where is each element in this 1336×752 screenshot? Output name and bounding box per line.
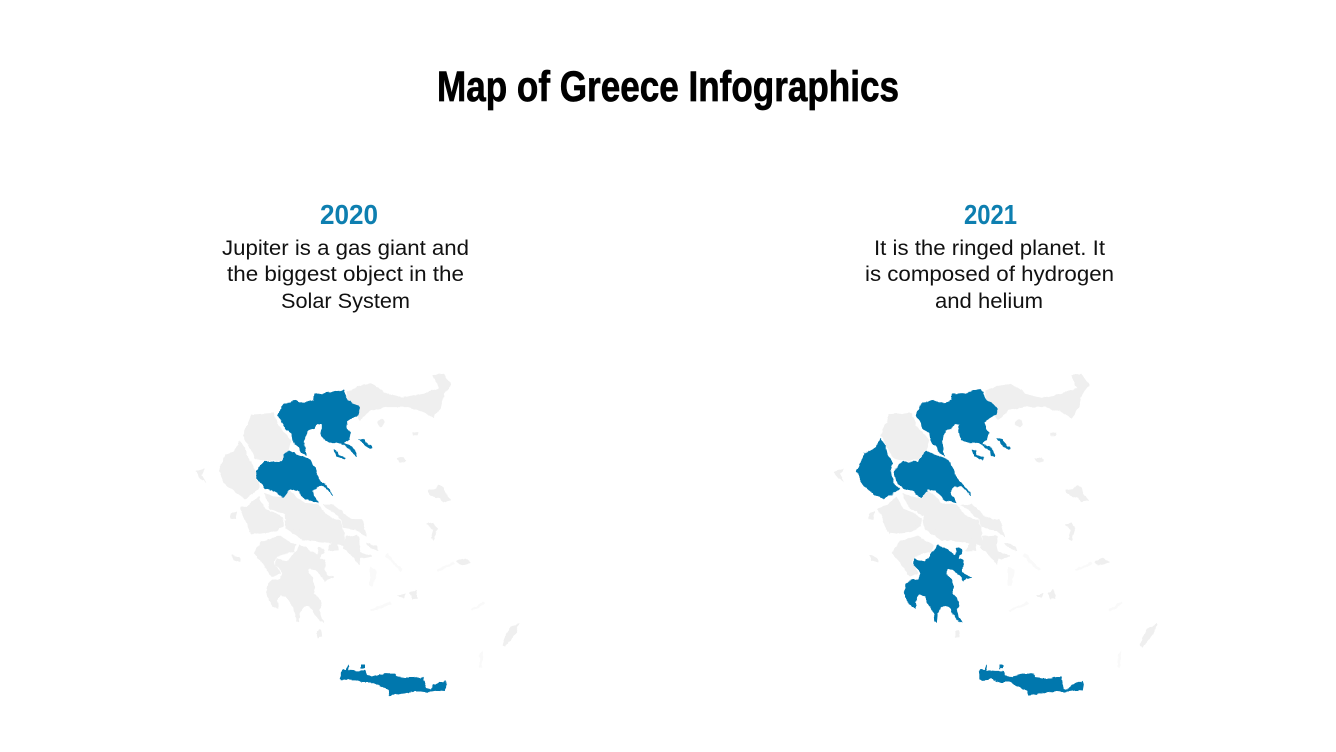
grey regions north [196,374,451,540]
grey regions centre [869,491,1010,558]
panel: 2021 [834,199,1157,695]
highlighted region: Crete [341,665,446,695]
grey regions south [232,520,379,637]
text block 2021 [865,237,1114,313]
year heading 2020: 2020 [320,199,378,230]
text block 2020: Solar System [281,290,410,313]
map of Greece 2020 [196,374,519,695]
text block 2021: is composed of hydrogen [865,263,1114,286]
highlighted region: Macedonia islets [334,438,372,459]
highlighted region: Thessaly [894,451,971,502]
text block 2021: It is the ringed planet. It [874,237,1105,260]
text block 2021: and helium [935,290,1043,313]
grey islands [370,553,519,668]
highlighted region: Thessaly [256,451,333,502]
panel: 2020 [196,199,519,695]
grey region: Peloponnese [266,545,334,623]
year heading 2021: 2021 [964,199,1017,230]
highlighted region: Peloponnese [904,545,972,623]
grey regions south [870,520,1017,637]
highlighted region: Macedonia [278,390,360,457]
grey islands [1008,553,1157,668]
text block 2020: the biggest object in the [227,263,464,286]
map of Greece 2021 [834,374,1157,695]
grey regions centre [231,491,372,558]
title: Map of Greece Infographics [437,63,899,111]
highlighted region: Epirus [857,439,899,498]
highlighted region: Crete [979,665,1084,695]
highlighted region: Macedonia islets [972,438,1010,459]
text block 2020 [222,237,469,313]
highlighted region: Macedonia [916,390,998,457]
grey regions north [834,374,1089,540]
text block 2020: Jupiter is a gas giant and [222,237,469,260]
